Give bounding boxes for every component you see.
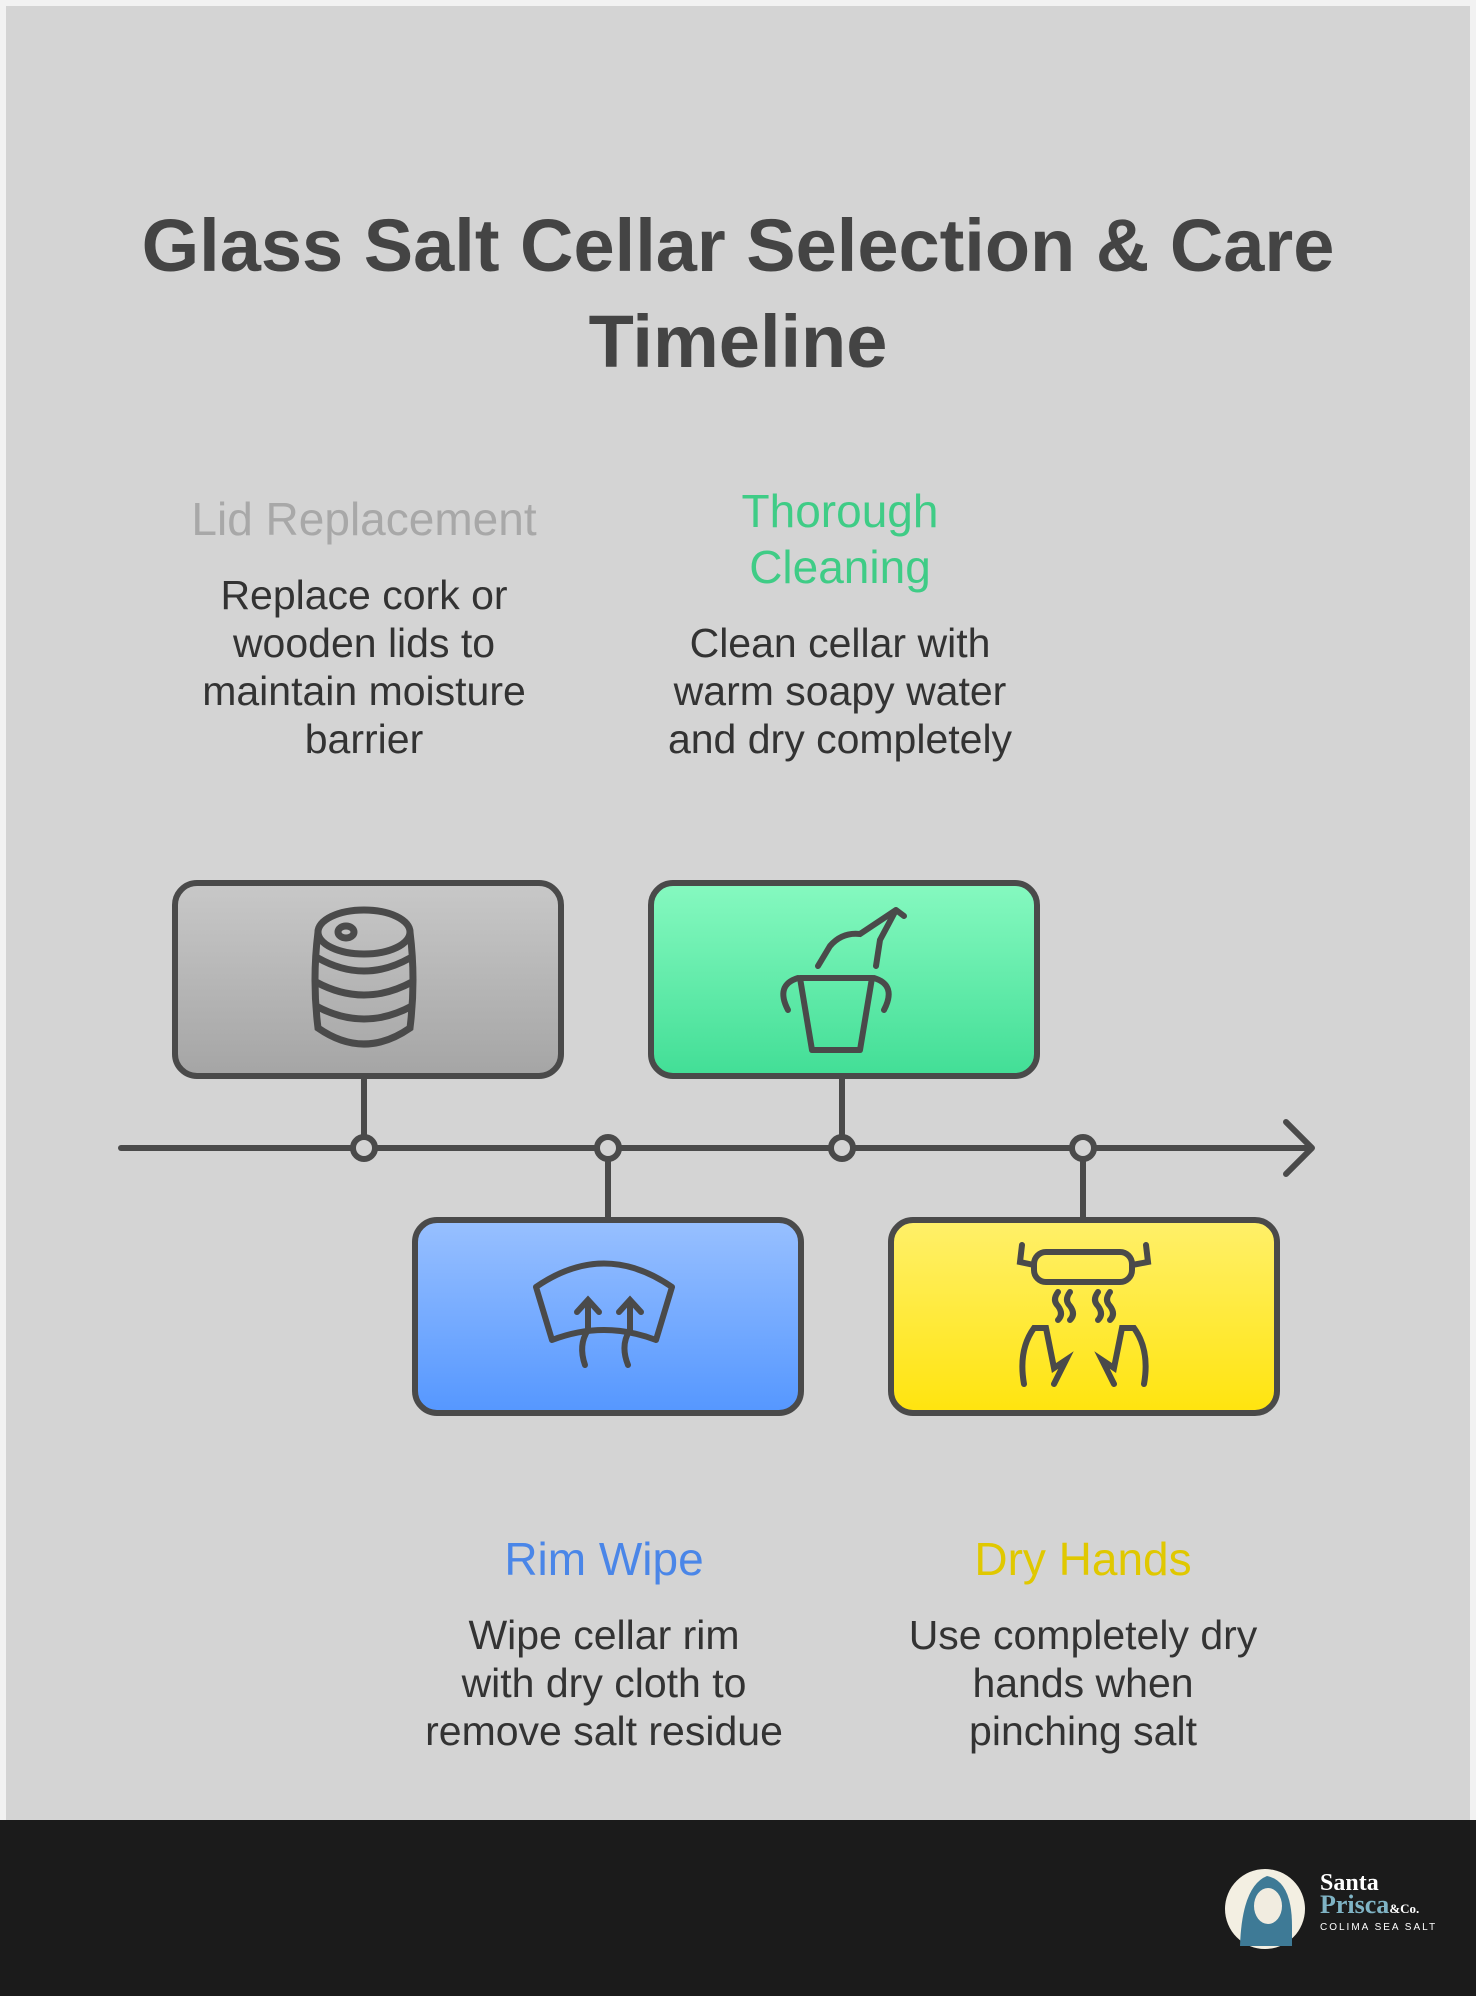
text: lid replacement [202,572,526,762]
timeline axis [121,1122,1312,1174]
logo: Santa Prisca [1225,1869,1437,1949]
logo: Santa Prisca: Santa [1320,1870,1379,1896]
heading: thorough cleaning: Cleaning [749,541,931,593]
heading: rim wipe: Rim Wipe [504,1533,704,1585]
text: rim wipe: Wipe cellar rim [468,1612,740,1658]
box: thorough cleaning with bucket icon [651,883,1037,1076]
title: Glass Salt Cellar Selection & Care [142,204,1334,287]
box: dry hands with hand dryer icon [891,1220,1277,1413]
box: rim wipe with windshield icon [415,1220,801,1413]
heading: thorough cleaning [742,485,938,593]
text: lid replacement: maintain moisture [202,668,526,714]
box: lid replacement with barrel icon [175,883,561,1076]
text: lid replacement: wooden lids to [233,620,495,666]
text: thorough cleaning [668,620,1012,762]
timeline diagram [118,880,1315,1416]
title: Timeline [589,300,887,383]
text: dry hands: Use completely dry [909,1612,1257,1658]
timeline nodes [353,1137,1094,1159]
text: thorough cleaning: warm soapy water [674,668,1006,714]
text: thorough cleaning: Clean cellar with [690,620,990,666]
text: dry hands: hands when [972,1660,1194,1706]
logo: Santa Prisca: Prisca&Co. [1320,1890,1419,1919]
text: rim wipe [425,1612,783,1754]
text: dry hands: pinching salt [969,1708,1197,1754]
text: lid replacement: barrier [305,716,423,762]
heading: thorough cleaning: Thorough [742,485,938,537]
text: lid replacement: Replace cork or [220,572,508,618]
connectors [364,1076,1083,1220]
logo: Santa Prisca: COLIMA SEA SALT [1320,1922,1437,1933]
heading: dry hands: Dry Hands [974,1533,1192,1585]
text: dry hands [909,1612,1258,1754]
text: thorough cleaning: and dry completely [668,716,1012,762]
title [142,204,1334,383]
heading: lid replacement: Lid Replacement [191,493,537,545]
text: rim wipe: remove salt residue [425,1708,783,1754]
text: rim wipe: with dry cloth to [462,1660,746,1706]
